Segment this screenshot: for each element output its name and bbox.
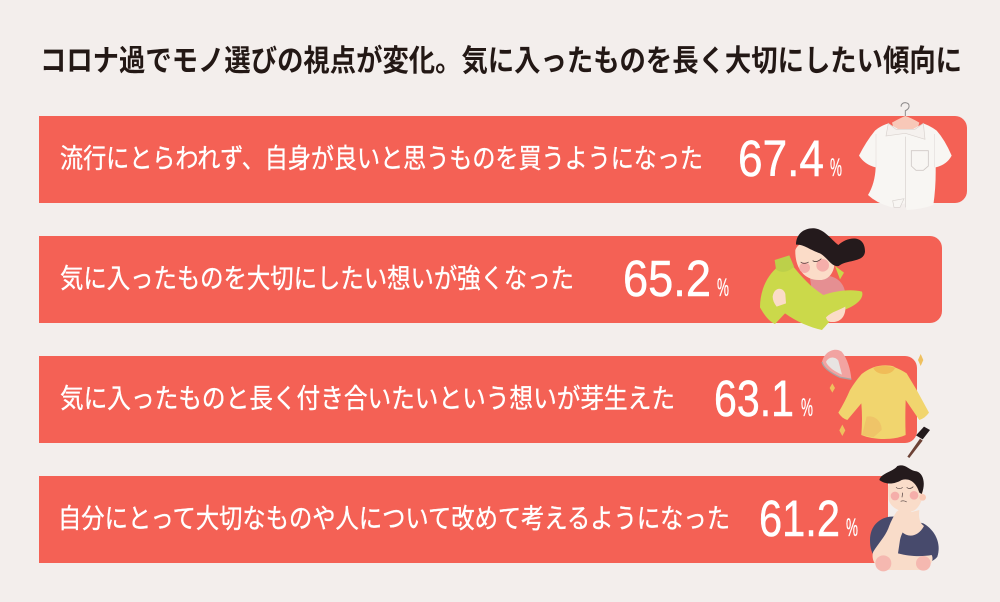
bar 2 label: 気に入ったものを大切にしたい想いが強くなった xyxy=(60,264,574,294)
bar 1 percent sign: % xyxy=(830,154,842,182)
bar 3 label: 気に入ったものと長く付き合いたいという想いが芽生えた xyxy=(60,384,675,414)
icon: woman hugging green sweater xyxy=(760,228,865,330)
bar 4 percent sign: % xyxy=(846,514,858,542)
icon: sparkles xyxy=(830,354,923,436)
bar 4 background xyxy=(39,476,888,563)
bar 4 label: 自分にとって大切なものや人について改めて考えるようになった xyxy=(58,504,730,534)
panel: bar 2 xyxy=(39,236,942,323)
bar 3 value: 63.1 xyxy=(714,370,794,427)
panel: bar 1 xyxy=(39,116,967,203)
bar 1 label: 流行にとらわれず、自身が良いと思うものを買うようになった xyxy=(60,144,703,174)
bar 1 background xyxy=(39,116,967,203)
bar 1 value: 67.4 xyxy=(738,130,824,187)
icon: yellow sweater xyxy=(838,365,929,439)
bar 3 background xyxy=(39,356,917,443)
panel: bar 3 xyxy=(39,356,917,443)
icon: thinking man xyxy=(870,465,939,571)
bar 4 value: 61.2 xyxy=(759,490,840,547)
bar 2 percent sign: % xyxy=(717,274,729,302)
icon: clothes iron xyxy=(822,350,851,379)
bar 2 background xyxy=(39,236,942,323)
bar 2 value: 65.2 xyxy=(623,250,711,307)
icon: clothes brush xyxy=(907,427,930,458)
bar 3 percent sign: % xyxy=(801,394,813,422)
icon: white shirt on hanger xyxy=(859,103,952,210)
panel: bar 4 xyxy=(39,476,888,563)
